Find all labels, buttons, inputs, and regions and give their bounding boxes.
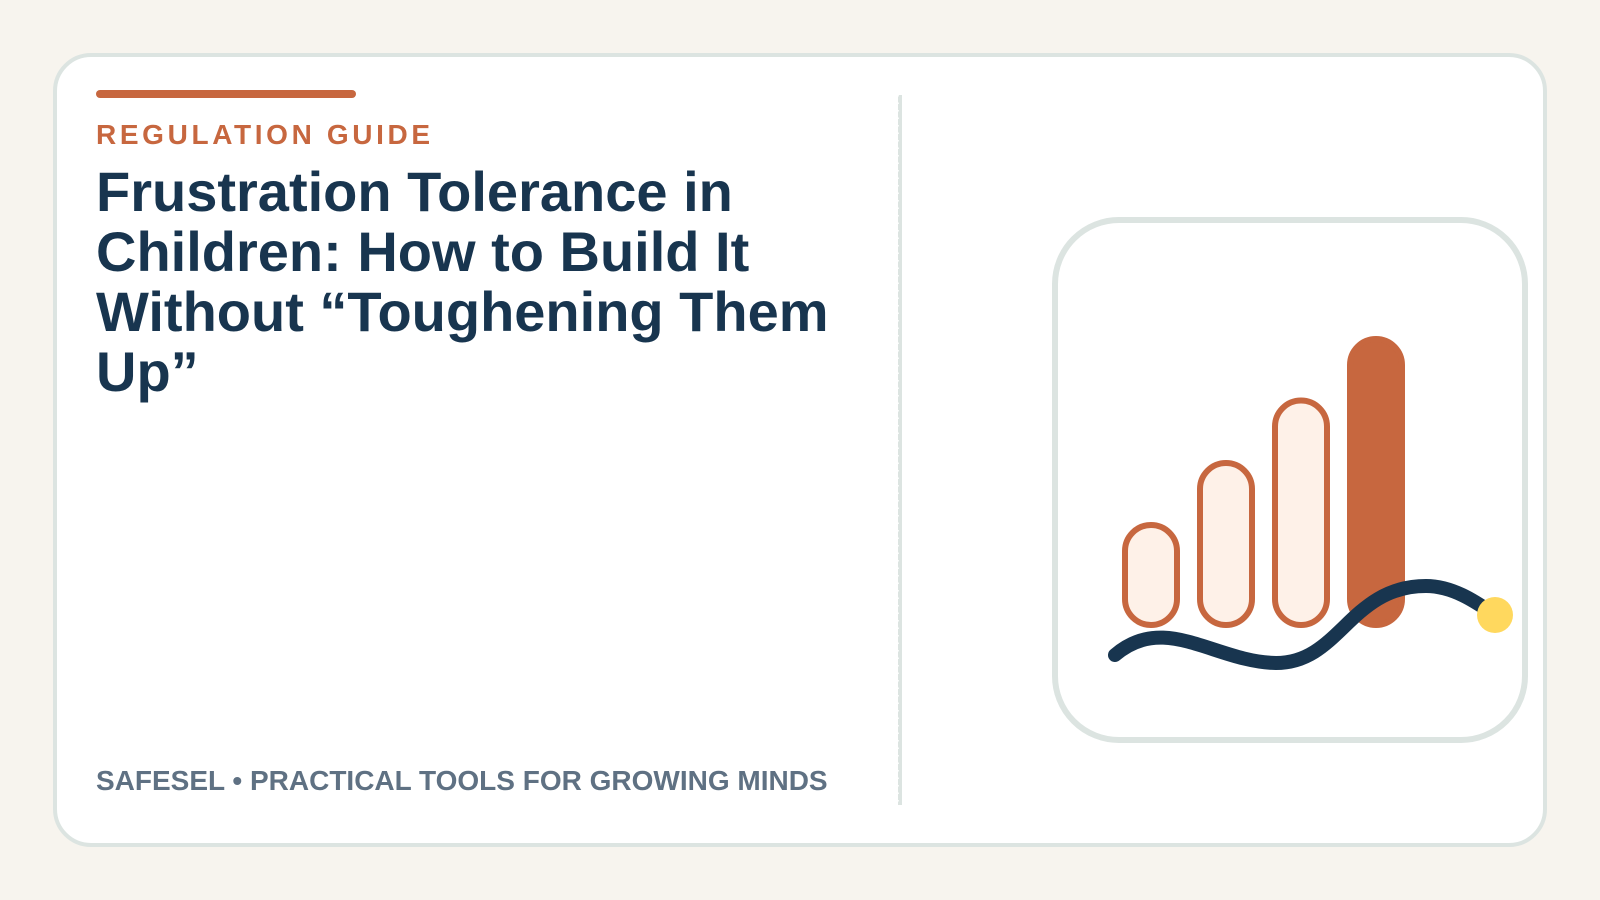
title: Without “Toughening Them [96,280,829,343]
footer tagline: SAFESEL • PRACTICAL TOOLS FOR GROWING MINDS [96,765,828,796]
title: Frustration Tolerance in [96,160,733,223]
column divider [898,95,902,805]
icon: yellow dot [1477,597,1513,633]
eyebrow label: REGULATION GUIDE [96,119,434,150]
panel: illustration frame [1055,220,1525,740]
wave line [1115,586,1495,663]
title: Up” [96,340,199,403]
title [96,160,829,403]
chart: rising bars [1125,339,1402,625]
accent bar [96,90,356,98]
title: Children: How to Build It [96,220,749,283]
